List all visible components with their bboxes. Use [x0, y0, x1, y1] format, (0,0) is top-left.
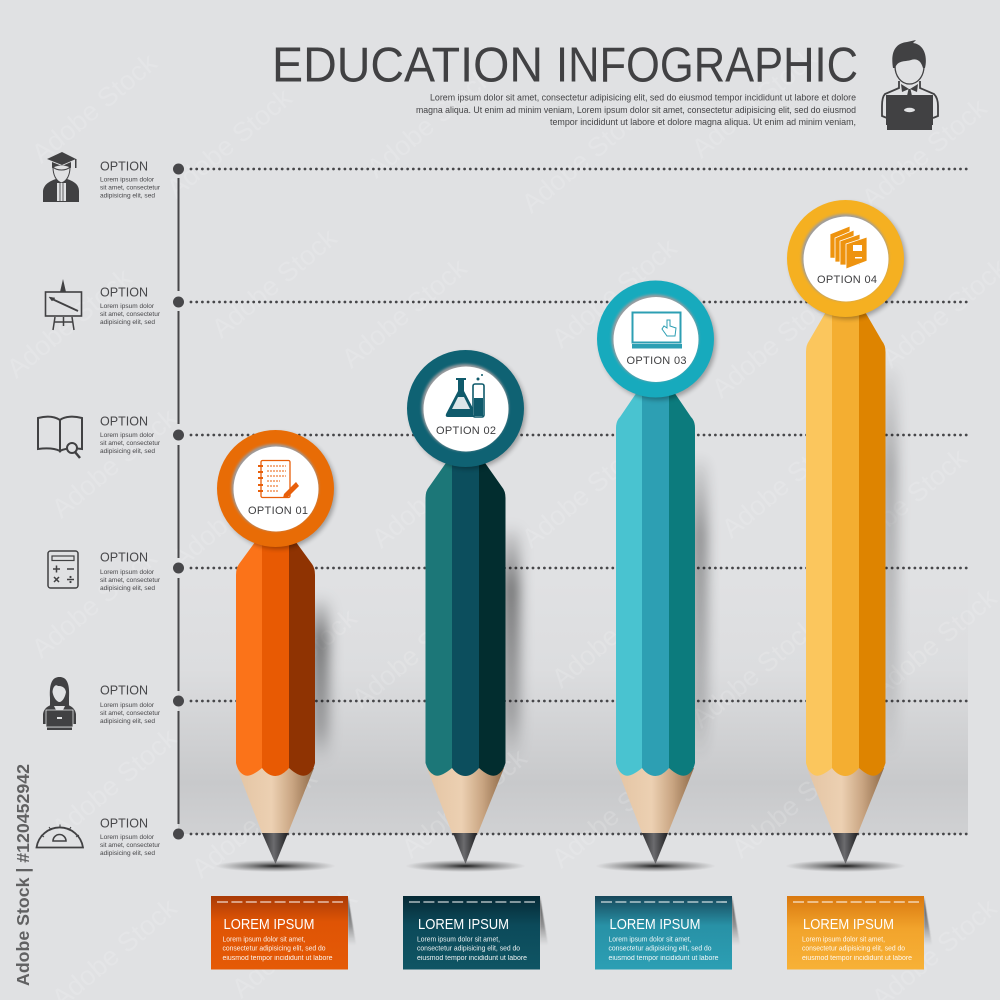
option label 4	[100, 550, 160, 592]
option label 5	[100, 684, 160, 725]
option label 6: adipisicing elit, sed	[100, 850, 156, 857]
label card 3: Lorem ipsum dolor sit amet,	[608, 936, 692, 944]
wood	[617, 768, 694, 833]
watermark pattern: Adobe Stock	[836, 442, 973, 564]
watermark pattern: Adobe Stock	[856, 92, 993, 214]
icon: touch laptop	[632, 312, 682, 348]
watermark pattern: Adobe Stock	[716, 422, 853, 544]
option label 2: sit amet, consectetur	[100, 311, 160, 318]
wood	[427, 768, 504, 833]
watermark pattern: Adobe Stock	[686, 612, 823, 734]
watermark pattern: Adobe Stock	[1, 262, 138, 384]
watermark pattern: Adobe Stock	[226, 602, 363, 724]
option label 3: adipisicing elit, sed	[100, 448, 156, 455]
label card 4: consectetur adipisicing elit, sed do	[802, 946, 905, 952]
ground shadow	[786, 860, 906, 872]
option label 1: adipisicing elit, sed	[100, 192, 156, 200]
icon: graduate	[43, 152, 79, 202]
badge label: OPTION 04	[817, 274, 877, 286]
badge label: OPTION 03	[626, 355, 686, 367]
gray band behind chart	[178, 580, 968, 834]
pencil 4: yellow	[786, 200, 906, 872]
watermark pattern: Adobe Stock	[361, 62, 498, 184]
label card 2: consectetur adipisicing elit, sed do	[417, 946, 520, 952]
option label 6: OPTION	[100, 816, 148, 830]
option label 4: Lorem ipsum dolor	[100, 569, 154, 576]
watermark pattern: Adobe Stock	[26, 47, 163, 169]
header description: tempor incididunt ut labore et dolore magna aliqua. Ut enim ad minim veniam,	[550, 117, 856, 127]
label card 2: Lorem ipsum dolor sit amet,	[417, 936, 500, 944]
option label 5: Lorem ipsum dolor	[100, 702, 154, 709]
watermark pattern: Adobe Stock	[161, 82, 298, 204]
label card 2: LOREM IPSUM	[418, 917, 509, 933]
watermark pattern: Adobe Stock	[396, 742, 533, 864]
option label 4: adipisicing elit, sed	[100, 585, 156, 592]
watermark pattern: Adobe Stock	[516, 432, 653, 554]
icon: protractor	[36, 824, 83, 848]
option label 6: Lorem ipsum dolor	[100, 834, 154, 841]
label card 1: consectetur adipisicing elit, sed do	[222, 946, 326, 952]
watermark pattern: Adobe Stock	[46, 402, 183, 524]
watermark pattern: Adobe Stock	[546, 572, 683, 694]
pencil body	[426, 460, 506, 776]
option label 2: OPTION	[100, 286, 148, 300]
header description: Lorem ipsum dolor sit amet, consectetur adipisicing elit, sed do eiusmod tempor incididunt ut labore et dolore	[430, 92, 856, 102]
badge ring	[220, 433, 336, 549]
option label 1: sit amet, consectetur	[100, 184, 160, 192]
option label 4: OPTION	[100, 550, 148, 564]
watermark pattern: Adobe Stock	[46, 722, 183, 844]
graphite tip	[642, 833, 668, 864]
watermark pattern: Adobe Stock	[546, 232, 683, 354]
option label 3: Lorem ipsum dolor	[100, 432, 154, 439]
label card 2	[403, 896, 548, 970]
pencil 2: dark teal	[406, 350, 526, 872]
badge inner	[422, 364, 508, 451]
badge inner	[232, 444, 318, 531]
badge inner	[802, 214, 888, 301]
label card 4: eiusmod tempor incididunt ut labore	[802, 955, 912, 962]
label card 2: eiusmod tempor incididunt ut labore	[417, 955, 527, 962]
pencil shadow	[693, 460, 706, 760]
title: INFOGRAPHIC	[556, 38, 858, 92]
label card 4: Lorem ipsum dolor sit amet,	[802, 936, 885, 944]
option label 5: OPTION	[100, 684, 148, 698]
option label 2: adipisicing elit, sed	[100, 319, 156, 326]
label card 3: consectetur adipisicing elit, sed do	[608, 946, 712, 952]
badge label: OPTION 01	[248, 505, 308, 517]
label card 1	[211, 896, 356, 970]
badge label: OPTION 02	[436, 425, 496, 437]
pencil body	[806, 310, 886, 776]
icon: man with laptop	[882, 40, 938, 130]
badge ring	[790, 203, 906, 319]
icon: lab flask	[446, 374, 484, 417]
graphite tip	[262, 833, 288, 864]
header description: magna aliqua. Ut enim ad minim veniam, Lorem ipsum dolor sit amet, consectetur adipisicing elit, sed do eiusmod	[416, 105, 856, 115]
watermark pattern: Adobe Stock	[546, 752, 683, 874]
watermark pattern: Adobe Stock	[346, 592, 483, 714]
wood	[237, 768, 314, 833]
label card 1: eiusmod tempor incididunt ut labore	[222, 955, 333, 962]
pencil shadow	[503, 530, 519, 760]
header description	[416, 92, 856, 127]
title	[272, 38, 858, 92]
option label 3	[100, 414, 160, 455]
watermark pattern: Adobe Stock	[336, 252, 473, 374]
graphite tip	[453, 833, 477, 864]
option label 4: sit amet, consectetur	[100, 577, 160, 584]
watermark pattern: Adobe Stock	[366, 432, 503, 554]
label card 4: LOREM IPSUM	[803, 917, 894, 933]
icon: easel	[46, 279, 82, 330]
option label 5: adipisicing elit, sed	[100, 718, 156, 725]
timeline axis	[173, 164, 184, 840]
wood	[807, 768, 884, 833]
pencil shadow	[312, 600, 328, 760]
label card 3	[595, 896, 740, 970]
option label 5: sit amet, consectetur	[100, 710, 160, 717]
option label 6: sit amet, consectetur	[100, 842, 160, 849]
watermark pattern: Adobe Stock	[166, 452, 303, 574]
label card 4	[787, 896, 932, 970]
option label 6	[100, 816, 160, 857]
label card 3: LOREM IPSUM	[610, 917, 700, 933]
title: EDUCATION	[272, 38, 543, 92]
stock id text: Adobe Stock | #120452942	[13, 764, 33, 986]
pencil 1: orange	[216, 430, 336, 872]
label card 1: LOREM IPSUM	[224, 917, 314, 933]
label card 1: Lorem ipsum dolor sit amet,	[222, 936, 306, 944]
left option labels	[100, 160, 160, 857]
pencil body	[236, 538, 315, 776]
icon: notebook	[258, 460, 299, 498]
icon: calculator	[48, 551, 78, 588]
ground shadow	[216, 860, 336, 872]
option label 1	[100, 160, 160, 200]
watermark pattern: Adobe Stock	[726, 742, 863, 864]
badge ring	[410, 353, 526, 469]
graphite tip	[833, 833, 858, 864]
pencil 3: cyan	[596, 280, 716, 872]
watermark pattern: Adobe Stock	[206, 222, 343, 344]
watermark pattern: Adobe Stock	[186, 762, 323, 884]
watermark pattern: Adobe Stock	[866, 582, 1000, 704]
pencil body	[616, 392, 695, 776]
option label 3: sit amet, consectetur	[100, 440, 160, 447]
icon: books	[830, 226, 867, 269]
option label 1: OPTION	[100, 160, 148, 174]
option label 2: Lorem ipsum dolor	[100, 303, 154, 310]
icon: book with magnifier	[38, 417, 82, 458]
watermark pattern: Adobe Stock	[686, 42, 823, 164]
badge ring	[600, 284, 716, 400]
option label 2	[100, 286, 160, 326]
label card 3: eiusmod tempor incididunt ut labore	[608, 955, 719, 962]
ground shadow	[406, 860, 526, 872]
icon: woman with laptop	[43, 677, 76, 730]
option label 3: OPTION	[100, 414, 148, 428]
watermark pattern: Adobe Stock	[516, 97, 653, 219]
ground shadow	[596, 860, 716, 872]
option label 1: Lorem ipsum dolor	[100, 176, 154, 184]
dotted gridlines	[191, 169, 970, 834]
pencil shadow	[883, 370, 896, 760]
watermark pattern: Adobe Stock	[26, 542, 163, 664]
watermark pattern: Adobe Stock	[706, 282, 843, 404]
badge inner	[612, 294, 698, 382]
